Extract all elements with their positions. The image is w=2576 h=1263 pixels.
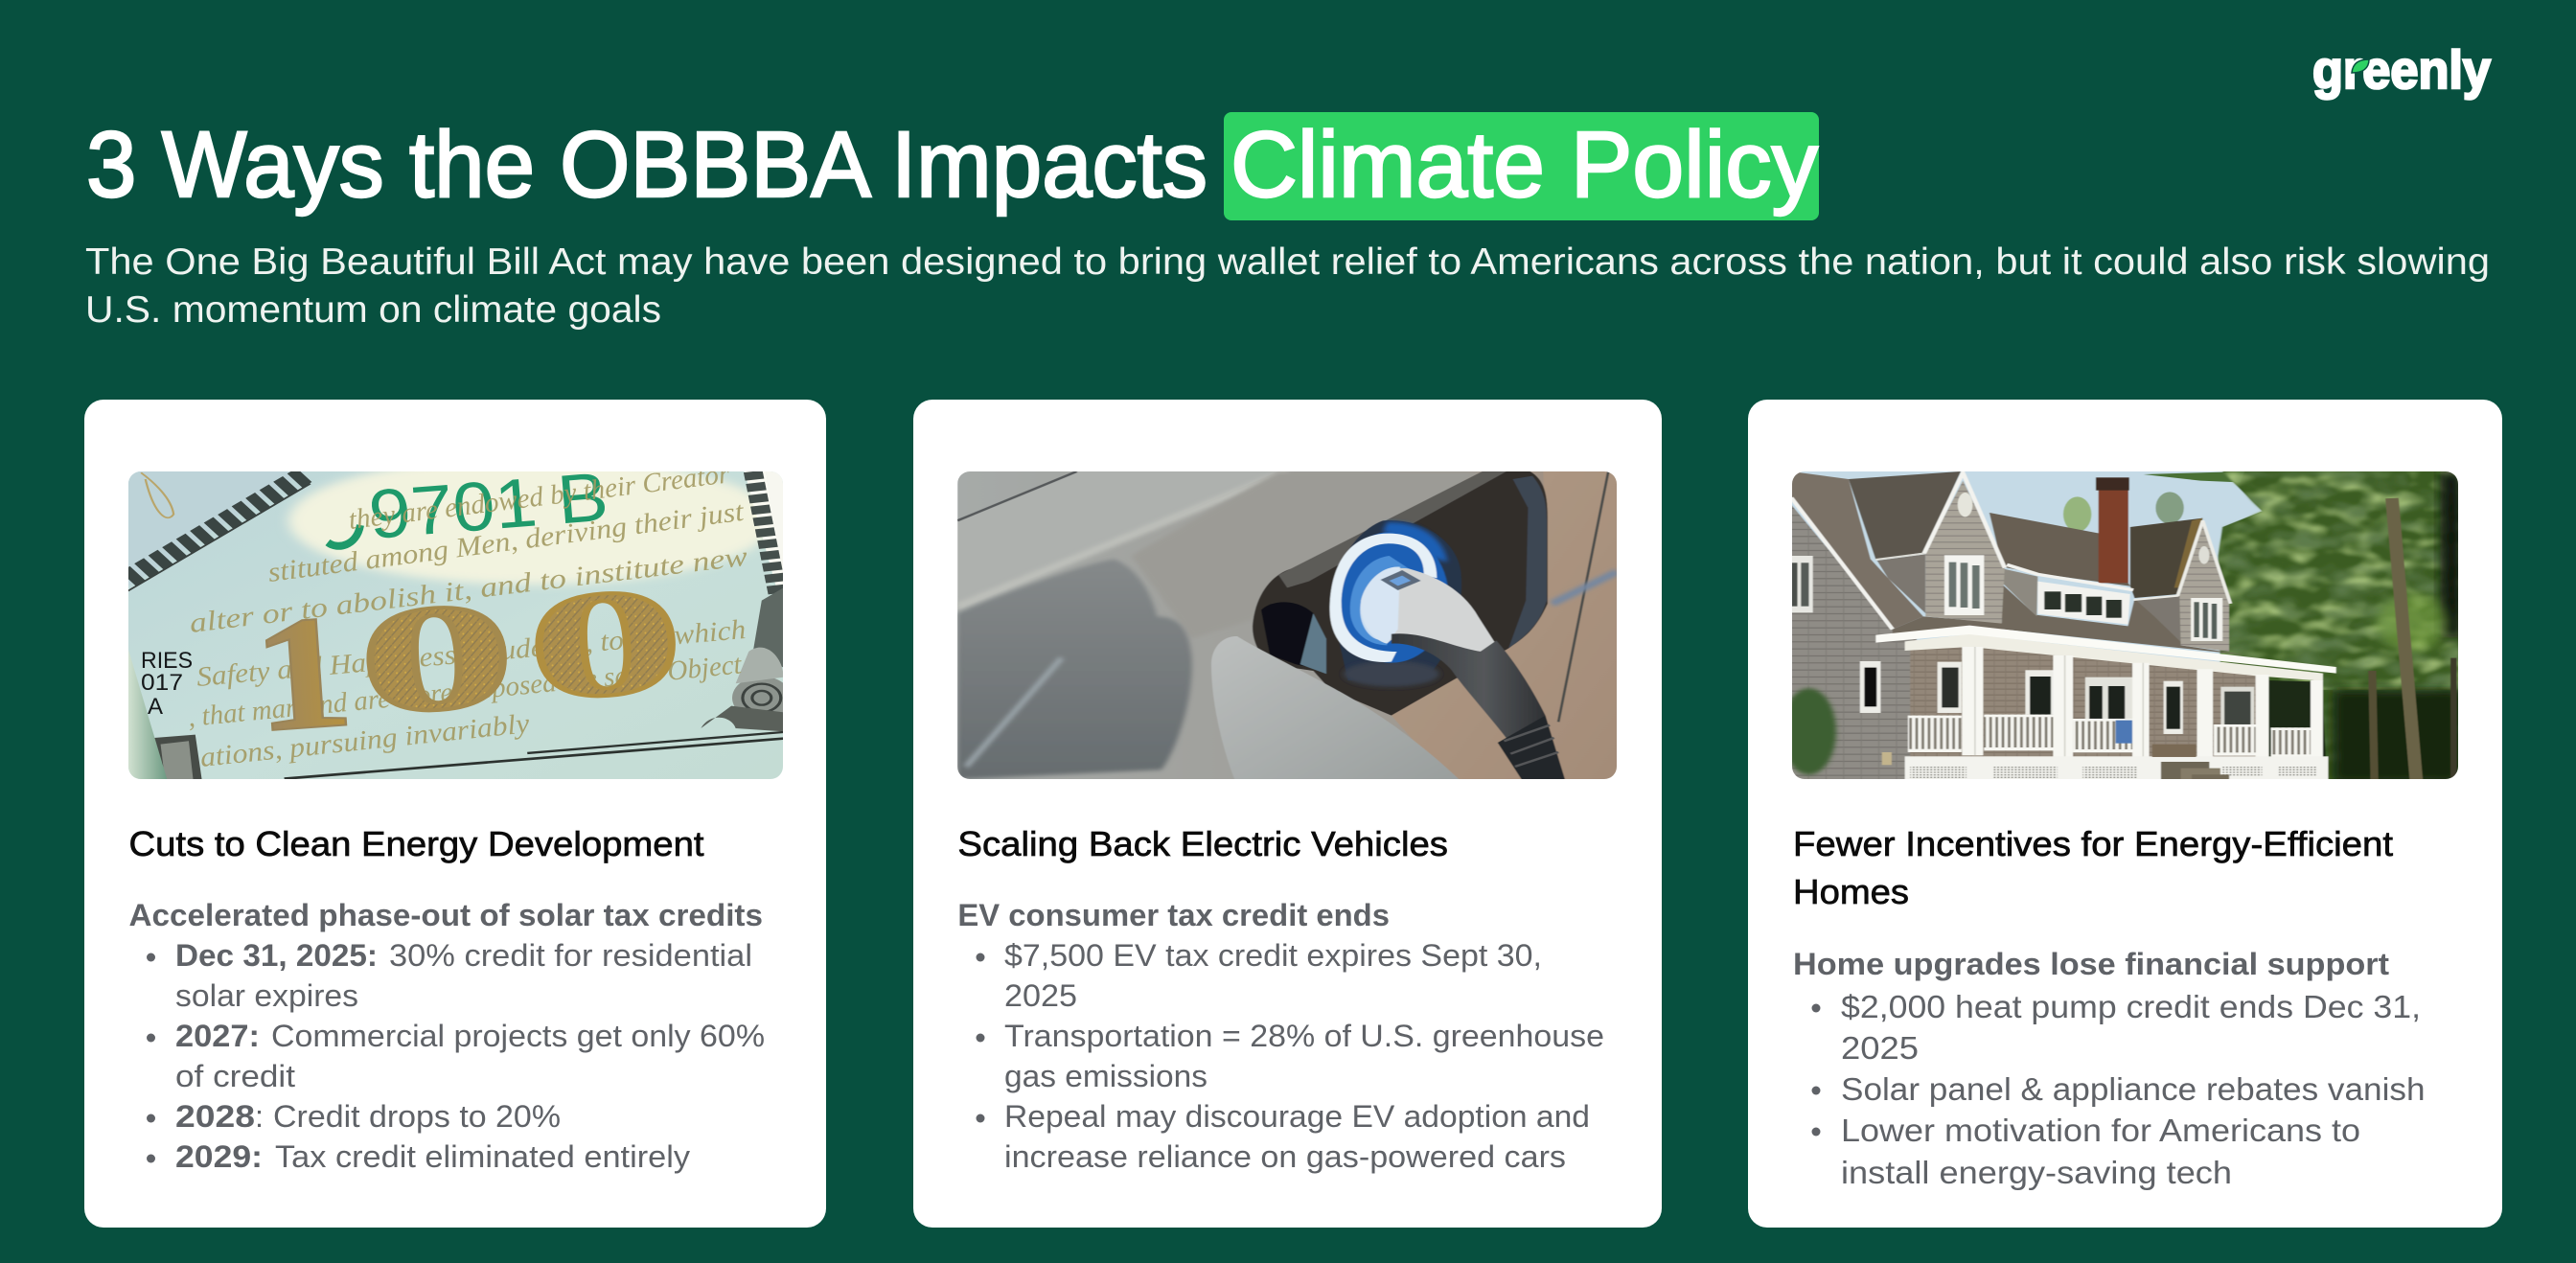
porch wall	[1910, 644, 2258, 759]
photo: hundred dollar bill: ations, pursuing invariably	[198, 708, 531, 773]
bullet list: increase reliance on gas-powered cars	[1004, 1139, 1566, 1174]
bullet list: :	[255, 1099, 264, 1134]
bullet list: Solar panel & appliance rebates vanish	[1841, 1072, 2425, 1108]
photo: hundred dollar bill: Safety and Happiness. Prudence, to be, which	[196, 614, 747, 693]
dormer 3	[2179, 524, 2229, 652]
bullet list: 2025	[1004, 978, 1077, 1013]
bullet list: Dec 31, 2025:	[175, 938, 378, 973]
panel: electric vehicles	[913, 400, 1662, 1228]
series label: RIES	[141, 648, 193, 674]
card heading: Cuts to Clean Energy Development	[128, 824, 703, 863]
bullet list: gas emissions	[1004, 1059, 1208, 1093]
card heading: Scaling Back Electric Vehicles	[957, 824, 1448, 863]
title	[86, 112, 1819, 220]
glowing ring	[1330, 520, 1461, 680]
subtitle: U.S. momentum on climate goals	[85, 289, 661, 331]
porch roof	[1905, 634, 2323, 681]
bullet list: 30% credit for residential	[389, 938, 752, 973]
bullet list: solar expires	[175, 978, 358, 1013]
plug	[1361, 568, 1496, 652]
bullet list: Repeal may discourage EV adoption and	[1004, 1099, 1590, 1134]
bullet list: Tax credit eliminated entirely	[275, 1139, 691, 1174]
card heading: Fewer Incentives for Energy-Efficient	[1793, 824, 2393, 863]
panel: clean energy	[84, 400, 826, 1228]
subheading: Home upgrades lose financial support	[1793, 947, 2389, 981]
shrub	[1782, 688, 1836, 774]
logo: greenly: greenly	[2312, 39, 2491, 100]
dormer 2	[2037, 582, 2130, 625]
photo: hundred dollar bill: stituted among Men, deriving their just	[266, 496, 747, 588]
bullet list	[976, 938, 1604, 1174]
bullet list: $7,500 EV tax credit expires Sept 30,	[1004, 938, 1542, 973]
left windows	[1791, 556, 1813, 612]
railings	[1908, 715, 2316, 756]
bullet list: of credit	[175, 1059, 295, 1093]
bullet list: $2,000 heat pump credit ends Dec 31,	[1841, 990, 2421, 1025]
serial number	[326, 473, 605, 550]
panel: energy-efficient homes	[1748, 400, 2502, 1228]
left wall	[1791, 505, 1917, 779]
hole	[1253, 471, 1548, 716]
photo: hundred dollar bill: , that mankind are more disposed the same Object	[187, 649, 744, 733]
photo: hundred dollar bill	[128, 457, 792, 779]
serial number: 9701 B	[366, 459, 610, 554]
deck base	[1905, 756, 2328, 780]
bullet list: Commercial projects get only 60%	[271, 1019, 765, 1053]
photo: hundred dollar bill: they are endowed by their Creator	[347, 458, 732, 536]
bullet list	[147, 938, 765, 1174]
subheading: EV consumer tax credit ends	[957, 898, 1390, 932]
bullet list: Credit drops to 20%	[273, 1099, 561, 1134]
chimney	[2099, 481, 2128, 583]
bullet list: 2029:	[175, 1139, 263, 1174]
subheading: Accelerated phase-out of solar tax credits	[128, 898, 763, 932]
series label	[142, 652, 192, 714]
subtitle: The One Big Beautiful Bill Act may have been designed to bring wallet relief to Americans across the nation, but it could also risk slowing	[85, 241, 2490, 283]
bullet list	[1811, 990, 2425, 1191]
card heading: Homes	[1793, 872, 1909, 911]
bullet list: 2028	[175, 1099, 255, 1134]
photo: house with porch	[1782, 471, 2462, 783]
gold 100 numeral: 0	[521, 555, 689, 733]
porch windows	[1938, 662, 1962, 713]
bullet list: Lower motivation for Americans to	[1841, 1114, 2360, 1149]
highlighted title phrase: Climate Policy	[1230, 112, 1818, 217]
subtitle	[85, 241, 2490, 331]
gold 100 numeral: 0	[353, 569, 520, 747]
columns	[1962, 647, 2323, 760]
title: 3 Ways the OBBBA Impacts	[86, 112, 1208, 217]
bullet list: 2025	[1841, 1031, 1919, 1067]
series label: 017	[141, 670, 183, 696]
dormer 1	[1925, 481, 2005, 624]
photo: EV charging port	[957, 471, 1622, 781]
gold 100 numeral	[264, 591, 676, 731]
trees	[2219, 471, 2460, 779]
gold 100 numeral: 1	[246, 580, 358, 767]
bullet list: install energy-saving tech	[1841, 1156, 2232, 1191]
roofs	[1791, 471, 1923, 630]
bullet list: Transportation = 28% of U.S. greenhouse	[1004, 1019, 1604, 1053]
bullet list: 2027:	[175, 1019, 260, 1053]
grey shapes and flap	[957, 559, 1192, 779]
card heading	[1793, 824, 2393, 911]
photo: hundred dollar bill: alter or to abolish it, and to institute new	[188, 541, 749, 639]
series label: A	[148, 694, 163, 720]
